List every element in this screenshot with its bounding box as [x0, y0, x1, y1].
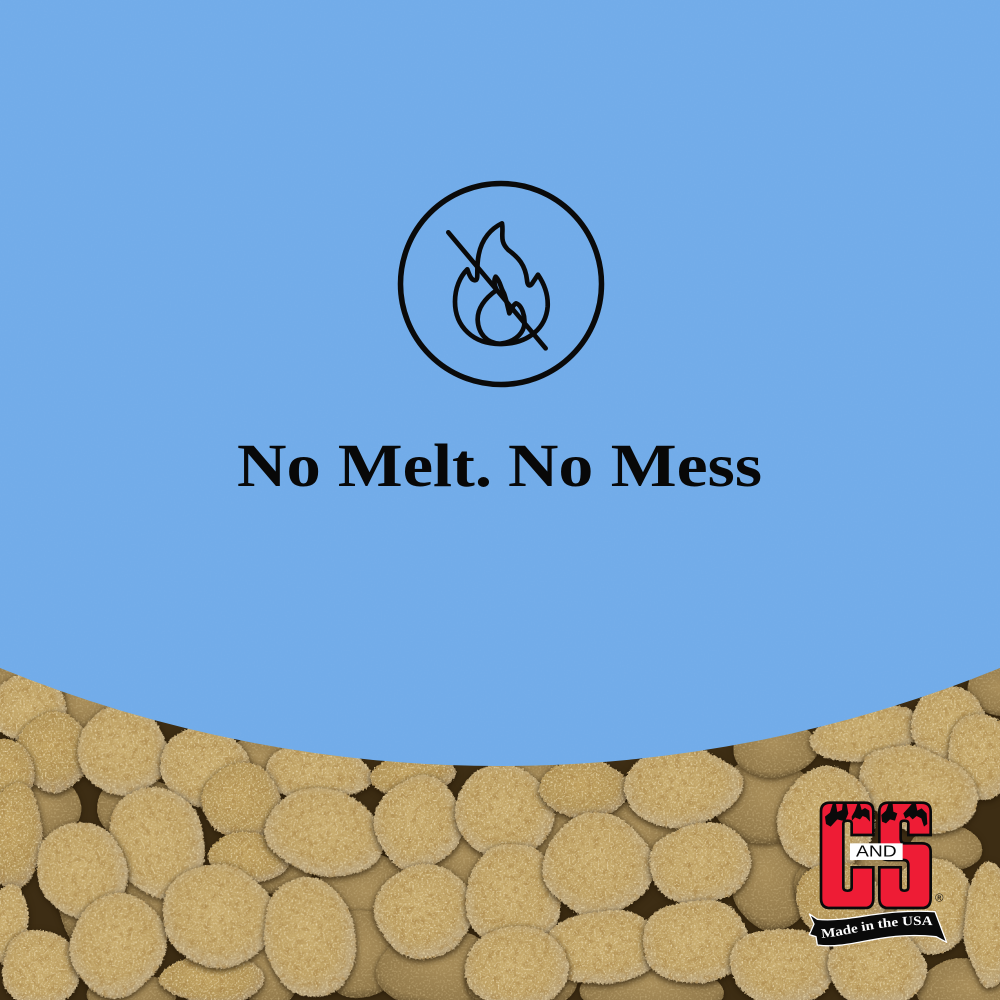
- logo letter S: [879, 803, 931, 908]
- heading: [237, 433, 762, 500]
- heading: No Melt.: [237, 433, 492, 500]
- icon ring: [400, 184, 602, 384]
- icon: no flame in circle: [400, 184, 602, 384]
- logo AND box: [850, 843, 903, 861]
- nuggets: back layer: [0, 662, 1000, 1000]
- heading: No Mess: [508, 433, 762, 500]
- flame glyph: [448, 223, 548, 348]
- logo ribbon: Made in the USA: [820, 916, 932, 938]
- logo: C and S Made in the USA: [808, 801, 948, 946]
- blue curved panel: [0, 0, 1000, 766]
- logo AND box: AND: [856, 844, 897, 861]
- photo: peanut nuggets background: [0, 650, 1000, 1000]
- logo registered mark: ®: [935, 892, 944, 904]
- logo letter C: [821, 803, 873, 908]
- logo ribbon: [808, 910, 948, 946]
- nuggets: front layer: [0, 676, 1000, 1000]
- logo black flame tops: [825, 804, 927, 827]
